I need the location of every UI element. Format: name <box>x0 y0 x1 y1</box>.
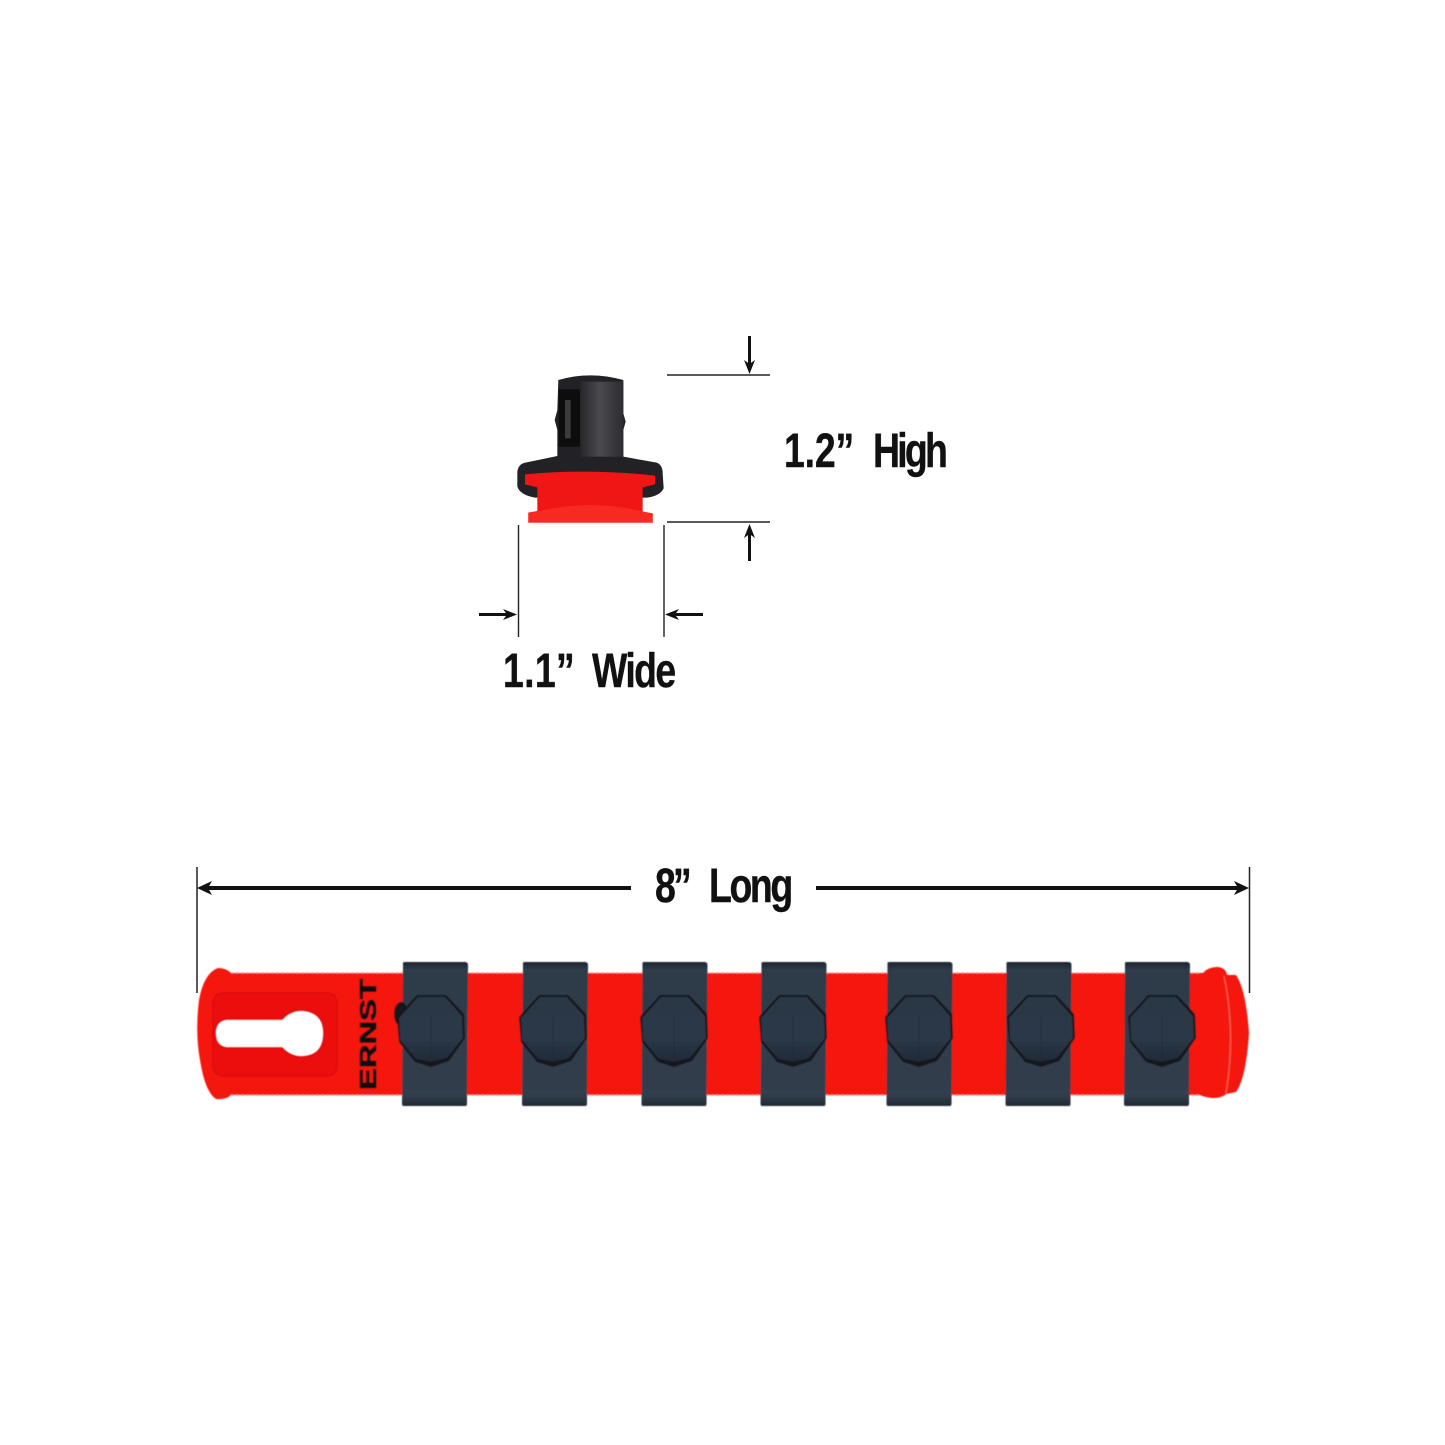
height dimension <box>667 336 948 561</box>
rail edge serrations <box>231 973 1200 1095</box>
red rail highlight <box>528 505 653 523</box>
socket rail <box>197 962 1249 1106</box>
width dimension <box>479 525 703 698</box>
red rail body with keyhole <box>197 967 1249 1099</box>
clip 5 <box>885 962 953 1106</box>
black clip and stem <box>517 375 664 498</box>
label: height: 1.2” <box>784 425 854 478</box>
ERNST logo: ERNST <box>355 979 381 1090</box>
label: height: High <box>873 425 948 478</box>
clip 1 <box>394 962 468 1106</box>
stem highlight <box>580 382 623 457</box>
label: length: Long <box>709 860 793 913</box>
arrow: length right <box>816 881 1249 895</box>
label: height <box>784 425 948 478</box>
arrow: bottom up <box>744 524 755 561</box>
end cap ridge <box>1224 976 1231 1093</box>
clip 4 <box>759 962 827 1106</box>
label: width <box>503 645 676 698</box>
end view of socket holder <box>517 375 664 523</box>
height extension lines <box>667 375 770 522</box>
width extension lines <box>518 525 664 637</box>
label: length: 8” <box>655 860 692 913</box>
clip 7 <box>1124 962 1196 1106</box>
arrow: left <box>479 609 517 620</box>
length extension lines <box>197 867 1250 993</box>
label: width: 1.1” <box>503 645 575 698</box>
arrow: right <box>665 609 703 620</box>
arrow: top down <box>744 336 755 374</box>
length dimension <box>197 860 1250 993</box>
clip 2 <box>519 962 588 1106</box>
keyhole recess <box>213 993 337 1076</box>
stem window <box>559 389 580 447</box>
clip 6 <box>1006 962 1075 1106</box>
arrow: length left <box>197 881 631 895</box>
red rail cross section <box>525 472 655 523</box>
label: width: Wide <box>592 645 676 698</box>
label: length <box>655 860 793 913</box>
clip 3 <box>640 962 708 1106</box>
